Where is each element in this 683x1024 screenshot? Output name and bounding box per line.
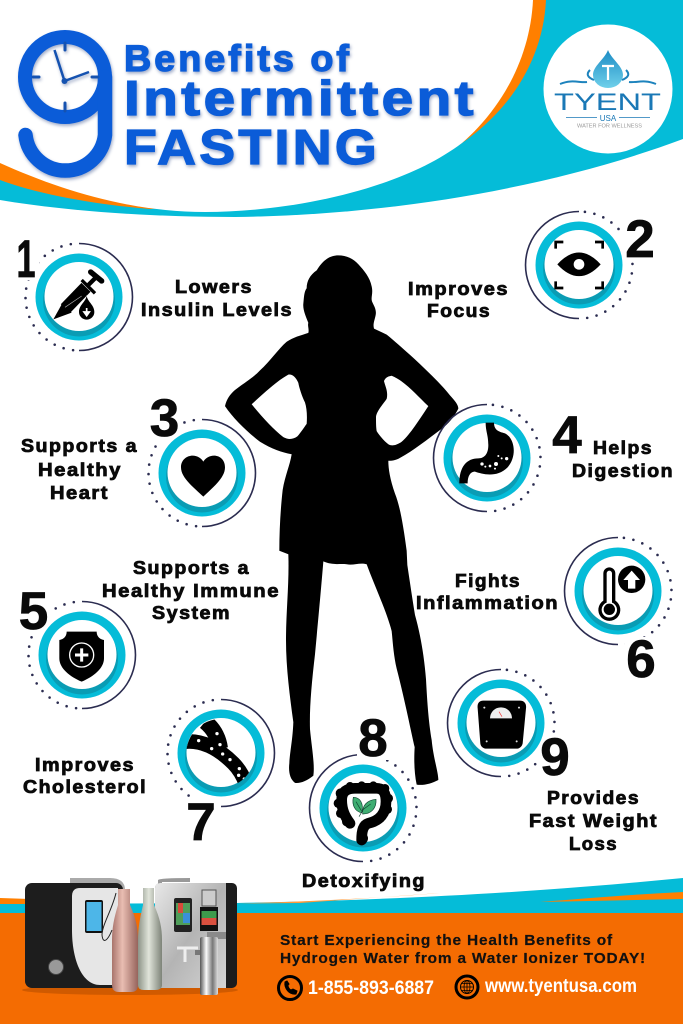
icon: stomach [459, 423, 514, 483]
benefit 1: lowers insulin levels [13, 230, 293, 350]
water drop with T [560, 50, 656, 88]
header banner [0, 0, 683, 217]
white header area [0, 0, 533, 212]
phone contact [278, 976, 434, 1000]
number 1 [13, 230, 39, 289]
icon: artery with plaque [185, 722, 246, 784]
benefit 5: supports a healthy immune system [17, 557, 280, 708]
orange streak right [540, 892, 683, 902]
orange strip left [0, 898, 30, 904]
badge ring [320, 764, 406, 852]
label: Healthy Immune [102, 580, 280, 601]
number 9: 9 [540, 728, 570, 787]
badge arcs [168, 700, 274, 806]
label: Cholesterol [23, 776, 147, 797]
label: Lowers [175, 276, 253, 297]
label [572, 437, 674, 481]
number 2: 2 [625, 210, 655, 269]
call to action text: Start Experiencing the Health Benefits of [280, 932, 613, 949]
label: Healthy [38, 459, 122, 480]
badge ring [158, 430, 246, 516]
benefit 7: improves cholesterol [23, 700, 274, 852]
badge arcs [526, 212, 632, 318]
icon: thermometer with up arrow [598, 566, 645, 621]
badge arcs [26, 244, 132, 350]
chrome filter and display [200, 890, 226, 995]
icon: eye in focus frame [556, 242, 603, 288]
phone number: 1-855-893-6887 [308, 977, 434, 999]
benefit 9: provides fast weight loss [448, 670, 658, 854]
heading line 1: Benefits of [124, 37, 352, 79]
orange swoosh [0, 0, 546, 209]
number 8: 8 [358, 709, 388, 768]
icon: phone [278, 976, 302, 1000]
label: Digestion [572, 460, 674, 481]
silver ionizer [155, 878, 237, 988]
orange base [0, 913, 683, 1024]
benefit 4: helps digestion [434, 404, 674, 512]
badge ring [178, 710, 264, 796]
icon: heart [181, 456, 225, 497]
number 6: 6 [626, 630, 656, 689]
icon: colon with leaves [334, 781, 393, 844]
label [21, 435, 138, 503]
badge ring [444, 414, 530, 502]
label: Detoxifying [302, 870, 426, 891]
benefit 3: supports a healthy heart [21, 389, 255, 526]
benefit 2: improves focus [408, 210, 658, 321]
badge ring [38, 612, 126, 698]
label: Insulin Levels [141, 299, 293, 320]
label: Provides [547, 787, 640, 808]
icon: syringe and drop [53, 272, 102, 320]
badge ring [574, 548, 662, 634]
cyan wave [0, 878, 683, 915]
big numeral 9 with clock [25, 37, 105, 171]
woman silhouette [225, 255, 458, 785]
badge arcs [149, 420, 255, 526]
label: Fights [455, 570, 521, 591]
benefit 6: fights inflammation [416, 538, 671, 689]
icon: shield with plus [59, 632, 104, 682]
label [529, 787, 658, 854]
website contact [456, 975, 637, 998]
number 4: 4 [552, 406, 582, 465]
label: Improves [408, 278, 509, 299]
benefit 8: detoxifying [302, 709, 426, 891]
cyan swoosh [0, 0, 683, 217]
label: Loss [569, 833, 618, 854]
label: System [152, 602, 231, 623]
heading line 3: FASTING [124, 121, 380, 175]
call to action text [280, 932, 646, 967]
label: Supports a [21, 435, 138, 456]
label [23, 754, 147, 797]
call to action text: Hydrogen Water from a Water Ionizer TODAY! [280, 950, 646, 967]
badge ring [458, 680, 544, 766]
label [141, 276, 293, 320]
label: Fast Weight [529, 810, 658, 831]
label: Helps [593, 437, 653, 458]
title [25, 37, 477, 175]
heading line 2: Intermittent [124, 72, 477, 126]
label: Heart [50, 482, 109, 503]
badge arcs [565, 538, 671, 644]
label: Improves [35, 754, 135, 775]
TYENT wordmark: TYENT [554, 89, 661, 116]
web address: www.tyentusa.com [484, 975, 637, 997]
product photo: water ionizers and bottles [22, 878, 238, 995]
badge arcs [310, 754, 416, 862]
label [416, 570, 559, 613]
label: Supports a [133, 557, 250, 578]
sage bottle [138, 888, 162, 990]
badge arcs [434, 404, 540, 512]
label: Inflammation [416, 592, 559, 613]
icon: globe [456, 976, 478, 998]
footer banner [0, 878, 683, 1024]
black ionizer [25, 878, 125, 988]
rose gold bottle [112, 889, 138, 992]
USA: USA [600, 114, 617, 123]
number 5: 5 [19, 582, 48, 641]
badge arcs [448, 670, 554, 776]
badge ring [536, 222, 622, 308]
label [408, 278, 509, 321]
icon: weighing scale [478, 701, 526, 749]
number 7: 7 [186, 793, 216, 852]
number 1: 1 [16, 230, 36, 289]
number 3: 3 [150, 389, 179, 448]
badge arcs [29, 602, 135, 708]
label: Focus [427, 300, 491, 321]
badge ring [36, 254, 122, 340]
tagline: WATER FOR WELLNESS [577, 124, 642, 130]
logo: Tyent USA [544, 24, 672, 154]
label [102, 557, 280, 623]
